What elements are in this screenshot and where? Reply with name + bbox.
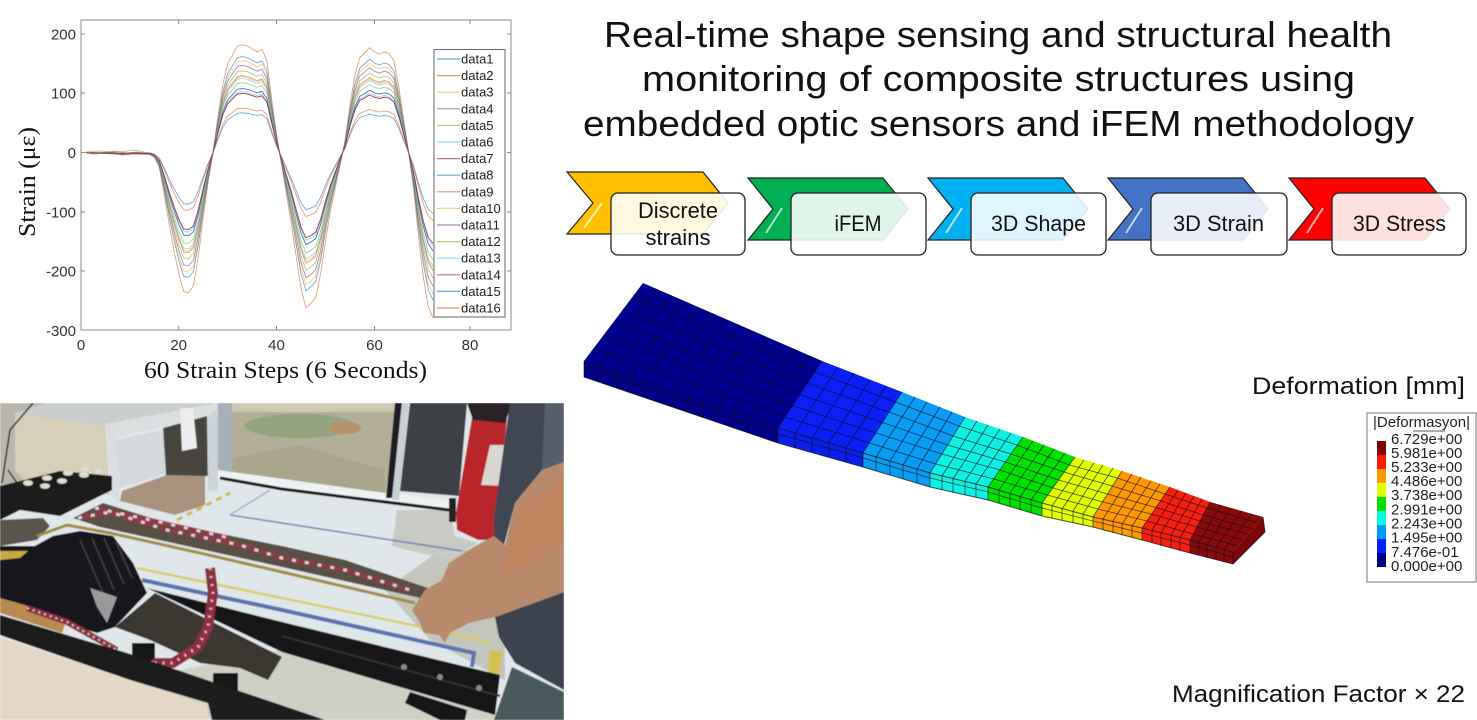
rail groove [282, 636, 500, 696]
contour colour legend [1367, 413, 1476, 582]
beige cabinet [15, 413, 110, 495]
chart legend: data14 [461, 267, 501, 282]
deformation heading: Deformation [mm] [1252, 373, 1465, 400]
y axis tick labels [46, 26, 76, 340]
legend title: |Deformasyon| [1373, 414, 1470, 431]
step: discrete strains: strains [646, 225, 710, 250]
x axis tick labels: 20 [170, 337, 187, 354]
chart legend: data5 [461, 118, 494, 133]
left wire bundle [27, 608, 117, 650]
lower black rail [0, 615, 325, 720]
rail bolts [401, 664, 482, 691]
step: discrete strains: Discrete [638, 198, 718, 223]
shelf dark interior [163, 416, 208, 478]
title: Real-time shape sensing and structural health [604, 14, 1392, 55]
panel: deformed FEM beam contour [584, 283, 1265, 564]
bottom corner rail [282, 707, 325, 720]
composite beam top surface [73, 503, 428, 598]
chart legend: data12 [461, 234, 501, 249]
step: 3D shape [928, 178, 1106, 255]
hanging wire bundle [153, 568, 213, 663]
legend values: 5.233e+00 [1391, 459, 1462, 476]
hazard tape [177, 493, 230, 520]
window sill [218, 470, 449, 508]
lower floor [130, 650, 500, 720]
chart legend: data7 [461, 151, 494, 166]
black support stand [0, 531, 147, 633]
chart legend: data3 [461, 85, 494, 100]
floor diagonal line [230, 490, 270, 515]
title: embedded optic sensors and iFEM methodology [583, 103, 1414, 144]
step: 3D strain [1108, 178, 1287, 255]
dark plate [115, 593, 282, 680]
white shelf top [105, 403, 218, 438]
fire extinguisher body [456, 418, 507, 540]
chart legend [434, 50, 505, 317]
grass patch [245, 414, 355, 438]
shelf leg [106, 428, 120, 502]
y axis tick labels: -300 [46, 323, 76, 340]
title: monitoring of composite structures using [642, 58, 1355, 99]
person arm and hands [412, 462, 564, 643]
magnification factor note: Magnification Factor × 22 [1172, 681, 1465, 708]
y axis tick labels: 100 [51, 86, 76, 102]
panel: strain line chart [15, 20, 511, 384]
step: 3D strain: 3D Strain [1173, 211, 1264, 236]
person jeans [494, 667, 564, 720]
legend values: 0.000e+00 [1391, 558, 1462, 575]
wood piece [0, 598, 65, 633]
step: iFEM: iFEM [834, 211, 882, 236]
floor line blue [142, 580, 474, 667]
chart legend: data15 [461, 284, 501, 299]
table leg two [213, 673, 238, 693]
step: 3D stress [1289, 178, 1466, 255]
strain curves [86, 45, 433, 318]
right tan floor [385, 550, 505, 680]
support stripes [80, 538, 132, 600]
grey fixture [0, 518, 50, 546]
person shirt upper [494, 403, 564, 556]
window top band [232, 403, 396, 412]
dirt patch [329, 422, 361, 434]
beam yellow edge [37, 525, 415, 603]
forearm highlight [500, 475, 564, 580]
window view [232, 403, 396, 493]
x axis tick labels: 0 [77, 337, 85, 354]
x axis tick labels: 60 [366, 337, 383, 354]
left wire highlight [27, 608, 117, 650]
beam wires pale [78, 508, 410, 590]
legend values: 7.476e-01 [1391, 544, 1459, 561]
yellow piece [0, 551, 28, 560]
side surface colour bands [584, 361, 1265, 564]
frame highlight [392, 403, 409, 500]
countertop [15, 403, 218, 427]
legend values: 3.738e+00 [1391, 487, 1462, 504]
dark wall panel [400, 403, 467, 496]
legend values [1391, 431, 1462, 575]
step: discrete strains [567, 172, 745, 255]
shelf column [207, 408, 218, 491]
y axis tick labels: 0 [68, 145, 76, 162]
legend values: 5.981e+00 [1391, 445, 1462, 462]
drawer [116, 430, 166, 488]
step: iFEM [748, 178, 926, 255]
mesh grid lines [584, 289, 1265, 564]
table legs [132, 643, 155, 661]
floor upper line [230, 515, 462, 551]
y axis title: Strain (με) [15, 127, 41, 237]
y axis tick labels: -200 [46, 264, 76, 280]
x axis tick labels: 80 [462, 337, 478, 354]
lower window ground [232, 445, 385, 493]
legend values: 2.243e+00 [1391, 516, 1462, 532]
yellow tape [488, 650, 503, 676]
left dark base [0, 546, 40, 576]
photo floor background [0, 403, 564, 720]
chart legend: data10 [461, 201, 501, 216]
cardboard box [120, 475, 205, 515]
x axis tick labels: 40 [268, 337, 285, 354]
battery block [0, 471, 112, 520]
legend values: 1.495e+00 [1391, 530, 1462, 546]
step: 3D shape: 3D Shape [991, 211, 1086, 236]
sill black line [220, 478, 449, 510]
chart legend: data13 [461, 251, 501, 266]
tan floor near extinguisher [392, 510, 478, 560]
beam wires red [78, 508, 410, 590]
cables top left [2, 403, 33, 490]
chart legend: data2 [461, 68, 494, 83]
plastic bag [90, 588, 117, 623]
extinguisher label [481, 445, 506, 486]
legend values: 2.991e+00 [1391, 502, 1462, 518]
x axis tick labels [77, 337, 478, 354]
window frame [386, 403, 402, 498]
legend colour strip [1377, 441, 1386, 567]
step: 3D stress: 3D Stress [1353, 211, 1446, 236]
top surface colour bands [584, 283, 1263, 552]
chart legend: data6 [461, 134, 494, 150]
paper note [180, 408, 197, 451]
y axis tick labels: -100 [46, 204, 76, 222]
extinguisher top [467, 403, 512, 423]
window column [218, 403, 232, 475]
panel: laboratory photo of instrumented composite beam [0, 403, 564, 720]
chart legend: data11 [461, 218, 500, 232]
chart legend: data1 [461, 52, 494, 66]
person shirt lower [495, 592, 564, 690]
chart legend: data9 [461, 184, 494, 199]
legend values: 4.486e+00 [1391, 473, 1462, 490]
pre-load noise on the flat segment [86, 150, 152, 155]
process flow: chevron steps [567, 172, 1466, 255]
floor line yellow [137, 568, 489, 642]
white table [0, 637, 208, 720]
white knobs [23, 467, 103, 489]
chart legend: data8 [461, 168, 494, 183]
rail bracket [405, 692, 467, 720]
left wall strip [0, 403, 44, 487]
person shirt sleeve [542, 403, 564, 470]
legend values: 6.729e+00 [1391, 431, 1462, 448]
chart legend: data16 [461, 300, 501, 316]
black table rail [147, 588, 500, 715]
x axis title: 60 Strain Steps (6 Seconds) [144, 358, 427, 384]
extinguisher post [449, 498, 456, 522]
plot axes frame [81, 20, 511, 330]
y axis tick labels: 200 [51, 26, 76, 44]
bundle highlight [153, 568, 213, 663]
title [583, 14, 1414, 144]
chart legend: data4 [461, 101, 494, 116]
